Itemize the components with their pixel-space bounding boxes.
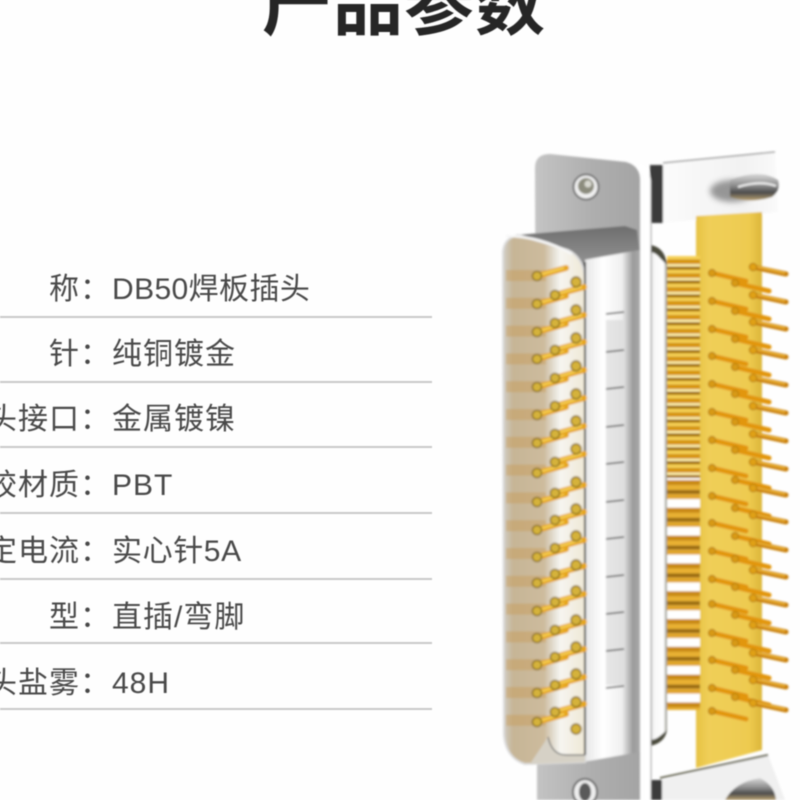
row: plastic material [0, 469, 432, 514]
row: type: 直插/弯脚 [112, 601, 245, 634]
shell front opening [503, 235, 585, 764]
flange screw bottom [573, 779, 597, 800]
row: rated current: 实心针5A [112, 535, 242, 568]
row: pin [0, 338, 432, 383]
front flange [535, 154, 651, 800]
row: name: DB50焊板插头 [112, 273, 310, 306]
rear solder pin bunch [667, 256, 700, 710]
row: pin: 纯铜镀金 [112, 338, 236, 371]
rear screw bottom [725, 778, 776, 800]
flange screw top [574, 174, 598, 200]
row: plastic material: PBT [112, 469, 173, 502]
rear bracket top [650, 152, 779, 223]
rear board pins [708, 263, 786, 719]
row: plug interface [0, 403, 432, 448]
row: salt spray: 48H [112, 667, 170, 700]
row: name [0, 273, 432, 318]
rear bracket bottom [650, 755, 785, 800]
row: name: 称： [49, 273, 111, 306]
shell body with notches [583, 250, 640, 762]
rear screw top [710, 174, 779, 202]
front gold pins [532, 268, 584, 734]
row: rated current [0, 535, 432, 580]
row: pin: 针： [49, 338, 111, 371]
product photo: DB50 connector [503, 152, 786, 800]
row: salt spray [0, 667, 432, 710]
row: plug interface: 金属镀镍 [112, 403, 236, 436]
parameter table [0, 273, 432, 710]
row: type [0, 601, 432, 644]
shell top surface [517, 226, 640, 300]
row: type: 型： [49, 601, 111, 634]
rear D-shell [650, 245, 667, 746]
printed circuit board [696, 212, 762, 768]
